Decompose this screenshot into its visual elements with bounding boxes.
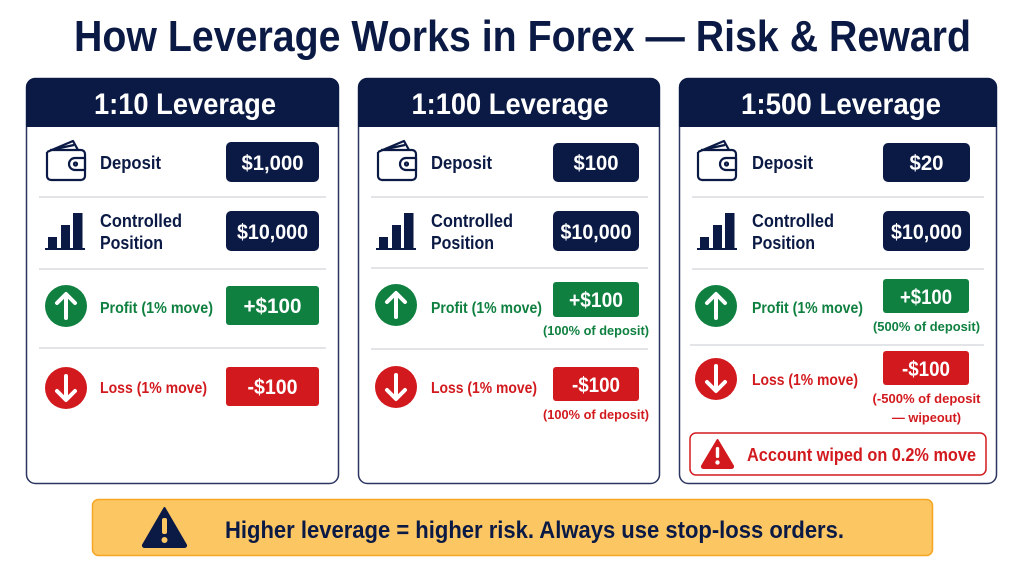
controlled position value: $10,000 (560, 221, 632, 244)
icon: loss arrow (45, 367, 87, 409)
icon: bar chart (45, 213, 85, 250)
panel: 1:500 leverage (679, 78, 997, 484)
controlled position label: Controlled (100, 211, 182, 231)
icon: profit arrow (45, 285, 87, 327)
icon: profit arrow (375, 284, 417, 326)
controlled position label: Position (100, 233, 163, 253)
panel header: 1:500 (679, 78, 997, 127)
controlled position value (226, 211, 319, 251)
panel: 1:10 leverage (26, 78, 339, 484)
icon: loss arrow (695, 358, 737, 400)
profit value: +$100 (244, 295, 302, 318)
profit value (226, 286, 319, 325)
loss note: (-500% of deposit (872, 391, 981, 406)
panel header: 1:100: 1:100 Leverage (412, 88, 608, 121)
deposit value (553, 143, 639, 182)
controlled position label: Position (752, 233, 815, 253)
banner: risk warning (92, 500, 932, 556)
icon: wallet (698, 141, 736, 180)
icon: warning triangle (143, 508, 186, 547)
loss value (883, 351, 969, 385)
controlled position label: Controlled (752, 211, 834, 231)
deposit value: $100 (574, 152, 618, 175)
deposit label: Deposit (100, 153, 161, 173)
panel: 1:100 leverage (358, 78, 660, 484)
deposit value (226, 142, 319, 182)
profit value: +$100 (900, 286, 952, 309)
callout text: Account wiped on 0.2% move (747, 445, 976, 465)
profit label: Profit (1% move) (752, 300, 863, 317)
loss label: Loss (1% move) (100, 380, 207, 397)
deposit value: $20 (910, 152, 944, 175)
loss value: -$100 (248, 376, 298, 399)
profit value: +$100 (569, 289, 623, 312)
icon: warning triangle (702, 440, 733, 468)
deposit value: $1,000 (242, 152, 304, 175)
controlled position value (883, 211, 970, 251)
callout: account wiped (690, 433, 986, 475)
panel header: 1:100 (358, 78, 660, 127)
controlled position label: Controlled (431, 211, 513, 231)
profit note: (500% of deposit) (873, 319, 980, 334)
deposit label: Deposit (752, 153, 813, 173)
controlled position value: $10,000 (891, 221, 962, 244)
loss note: (100% of deposit) (543, 407, 649, 422)
icon: bar chart (376, 213, 416, 250)
icon: bar chart (697, 213, 737, 250)
loss value (226, 367, 319, 406)
icon: profit arrow (695, 285, 737, 327)
loss value: -$100 (572, 374, 620, 397)
loss note: — wipeout) (892, 410, 961, 425)
profit value (553, 282, 639, 317)
panel header: 1:500: 1:500 Leverage (741, 88, 941, 121)
profit value (883, 279, 969, 313)
loss label: Loss (1% move) (752, 372, 858, 389)
icon: wallet (378, 141, 416, 180)
deposit value (883, 143, 970, 182)
loss value (553, 367, 639, 401)
deposit label: Deposit (431, 153, 492, 173)
panel header: 1:10 (26, 78, 339, 127)
controlled position value (553, 211, 639, 251)
profit label: Profit (1% move) (100, 300, 213, 317)
controlled position value: $10,000 (237, 221, 308, 244)
controlled position label: Position (431, 233, 494, 253)
icon: wallet (47, 141, 85, 180)
icon: loss arrow (375, 366, 417, 408)
banner text: Higher leverage = higher risk. Always use stop-loss orders. (225, 517, 844, 544)
loss value: -$100 (902, 358, 950, 381)
profit note: (100% of deposit) (543, 323, 649, 338)
loss label: Loss (1% move) (431, 380, 537, 397)
profit label: Profit (1% move) (431, 300, 542, 317)
panel header: 1:10: 1:10 Leverage (94, 88, 276, 121)
